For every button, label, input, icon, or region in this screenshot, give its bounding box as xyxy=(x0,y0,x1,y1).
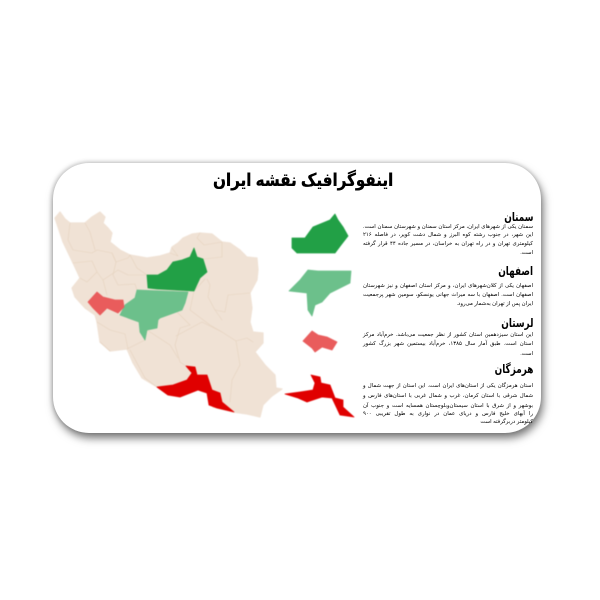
map of Iran xyxy=(55,212,282,417)
text block: Esfahan xyxy=(363,282,533,307)
map: Hormozgan province xyxy=(157,366,234,412)
text: سمنان یکی از شهرهای ایران، مرکز استان سمنان و شهرستان سمنان است. xyxy=(363,224,533,230)
icon: Esfahan shape xyxy=(289,270,351,316)
text: ایران پس از تهران به‌شمار می‌رود. xyxy=(456,301,533,307)
text: استان است. طبق آمار سال ۱۳۸۵، خرم‌آباد بیستمین شهر بزرگ کشور xyxy=(363,341,533,347)
text: کیلومتری تهران و در راه تهران به خراسان، در مسیر جاده ۴۴ قرار گرفته xyxy=(363,241,533,247)
text: این استان سیزدهمین استان کشور از نظر جمعیت می‌باشد. خرم‌آباد مرکز xyxy=(363,332,533,338)
map: Lorestan province xyxy=(88,292,124,315)
text: شمال شرقی با استان کرمان، غرب و شمال غربی با استان‌های فارس و xyxy=(363,393,533,399)
heading: Lorestan: لرستان xyxy=(501,316,533,330)
map: Semnan province xyxy=(147,248,207,291)
text block: Semnan xyxy=(363,224,533,256)
text block: Lorestan xyxy=(362,331,533,357)
icon: Lorestan shape xyxy=(303,331,337,352)
text: است. xyxy=(520,351,533,357)
heading: Esfahan: اصفهان xyxy=(498,264,533,278)
map: country outline xyxy=(55,212,282,417)
heading: Semnan: سمنان xyxy=(504,210,533,224)
panel: main card xyxy=(53,163,541,433)
text block: Hormozgan xyxy=(362,382,533,425)
title: اینفوگرافیک نقشه ایران xyxy=(213,170,393,190)
text: اصفهان است. اصفهان با سه میراث جهانی یونسکو، سومین شهر پرجمعیت xyxy=(363,292,533,298)
text: این شهر، در جنوب رشته کوه البرز و شمال دشت کویر، در فاصله ۲۱۶ xyxy=(363,232,533,238)
heading: Hormozgan: هرمزگان xyxy=(494,362,533,376)
map: Esfahan province xyxy=(120,290,188,340)
text: بوشهر و از شرق با استان سیستان‌وبلوچستان همسایه است و جنوب آن xyxy=(363,403,533,409)
icon: Hormozgan shape xyxy=(285,375,354,417)
text: کیلومتر دربرگرفته است xyxy=(480,419,533,425)
map: province borders xyxy=(68,223,253,402)
text: را آبهای خلیج فارس و دریای عمان در نواری به طول تقریبی ۹۰۰ xyxy=(363,411,533,417)
text: است. xyxy=(520,250,533,256)
text: اصفهان یکی از کلان‌شهرهای ایران، و مرکز استان اصفهان و نیز شهرستان xyxy=(363,283,533,289)
icon: Semnan shape xyxy=(292,214,348,253)
text: استان هرمزگان یکی از استان‌های ایران است. این استان از جهت شمال و xyxy=(363,383,533,389)
